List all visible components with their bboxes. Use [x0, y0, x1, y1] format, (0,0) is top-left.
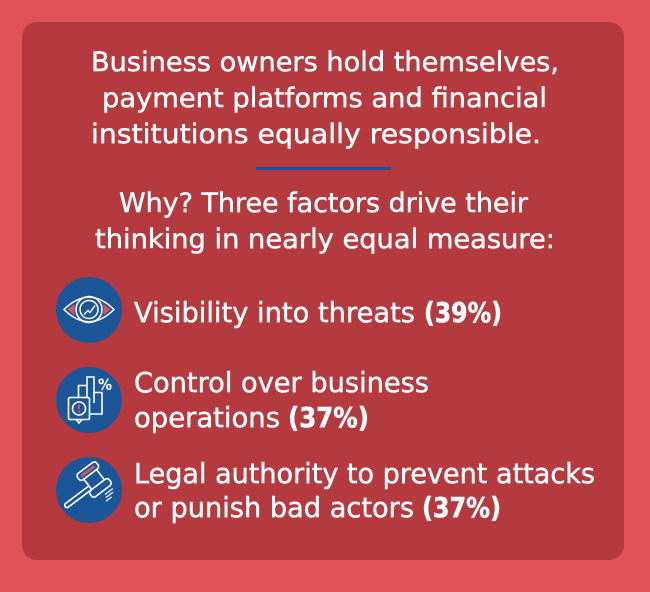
label: (37%)	[288, 402, 369, 434]
label: operations	[134, 402, 280, 434]
factor: legal	[54, 457, 595, 524]
icon: bar chart with percent	[56, 367, 122, 433]
factor: control	[56, 367, 429, 434]
icon: gavel	[54, 457, 122, 523]
label: (39%)	[424, 297, 502, 329]
factor: visibility	[56, 277, 502, 343]
icon: eye	[56, 277, 122, 343]
heading: Business owners hold themselves,	[91, 47, 559, 78]
label	[134, 458, 595, 524]
subheading	[95, 188, 555, 255]
heading: institutions equally responsible.	[91, 119, 541, 150]
label: Visibility into threats	[134, 297, 415, 329]
divider line	[256, 167, 391, 170]
heading: payment platforms and financial	[102, 83, 547, 114]
percent sign: %	[98, 375, 112, 394]
label: (37%)	[422, 492, 501, 524]
label: Legal authority to prevent attacks	[134, 458, 595, 490]
label: Control over business	[134, 367, 429, 399]
subheading: thinking in nearly equal measure:	[95, 224, 555, 255]
label: or punish bad actors	[134, 492, 414, 524]
label	[134, 367, 429, 434]
heading	[91, 47, 559, 150]
subheading: Why? Three factors drive their	[119, 188, 529, 219]
